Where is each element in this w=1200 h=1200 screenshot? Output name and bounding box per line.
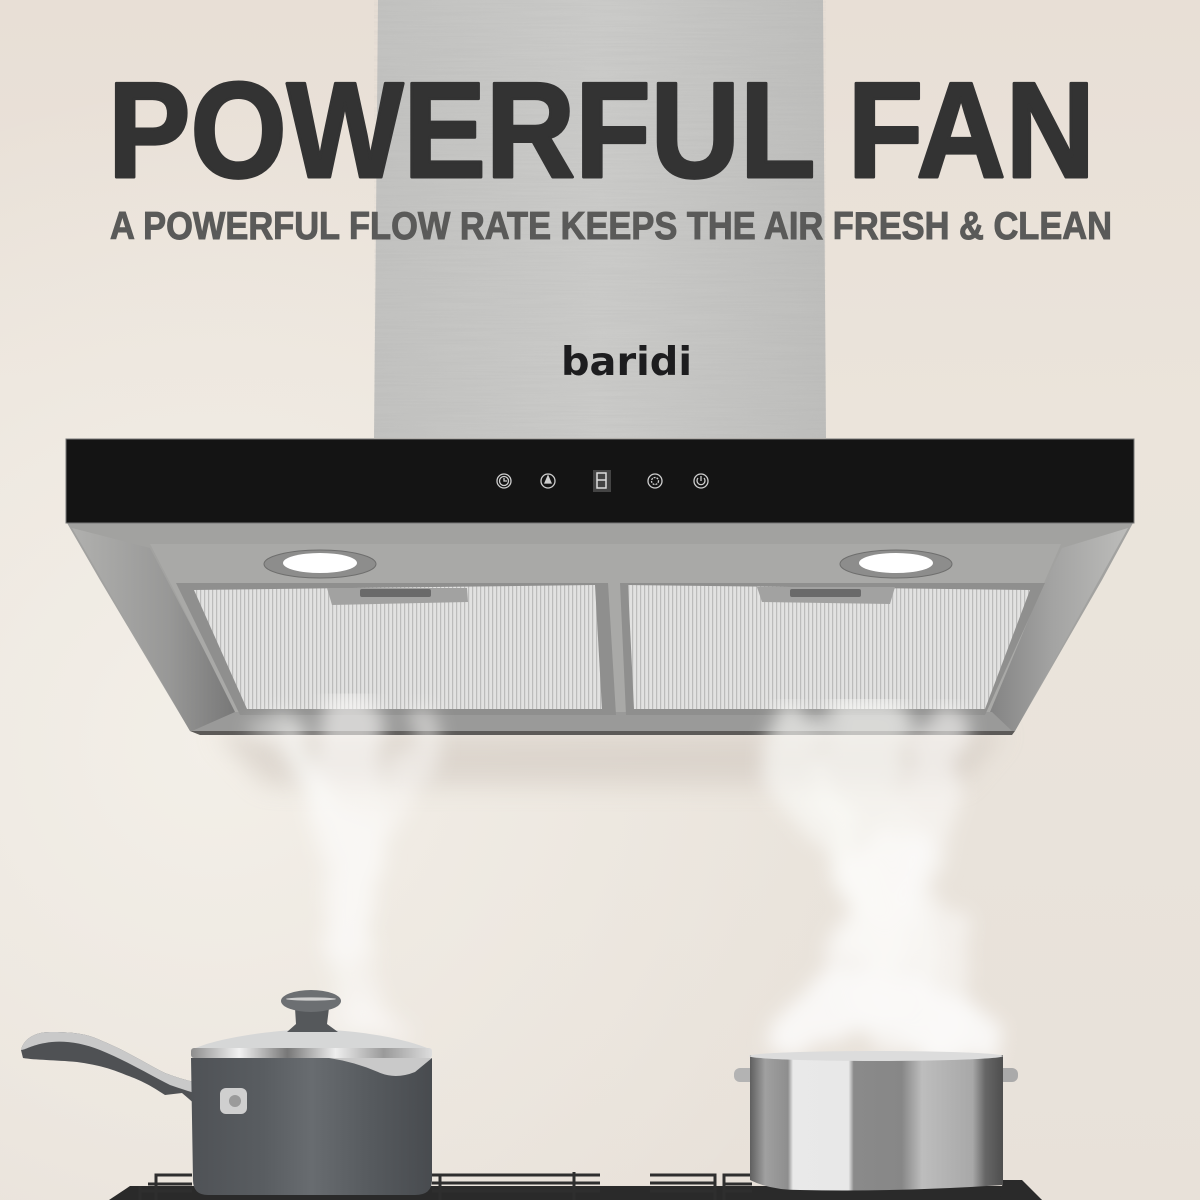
right filter bbox=[620, 583, 1045, 715]
stock pot bbox=[734, 1051, 1018, 1190]
logo: baridi: baridi bbox=[561, 340, 692, 385]
steam left bbox=[270, 725, 420, 1040]
icon: power bbox=[694, 474, 708, 488]
control icons bbox=[497, 470, 708, 492]
left filter bbox=[176, 583, 616, 715]
left light bbox=[264, 550, 376, 578]
pot rim bbox=[749, 1051, 1003, 1061]
title: POWERFUL FAN bbox=[108, 54, 1095, 206]
icon: fan bbox=[648, 474, 662, 488]
hood body underside bbox=[67, 523, 1133, 735]
pot body bbox=[750, 1055, 1003, 1190]
right light bbox=[840, 550, 952, 578]
pan spout rim bbox=[329, 1058, 432, 1076]
hood shadow on wall bbox=[215, 732, 1005, 785]
pan body bbox=[191, 1058, 432, 1195]
glass lid bbox=[191, 1029, 432, 1050]
lid knob bbox=[281, 990, 341, 1032]
range hood bbox=[66, 439, 1134, 735]
digit display bbox=[593, 470, 611, 492]
icon: timer bbox=[497, 474, 511, 488]
pan handle bbox=[21, 1032, 225, 1115]
pot left handle bbox=[734, 1068, 763, 1082]
stove grate bbox=[109, 1172, 1042, 1200]
steam right bbox=[785, 730, 975, 1040]
pot right handle bbox=[994, 1068, 1018, 1082]
lid rim bbox=[191, 1048, 432, 1058]
control panel glass band bbox=[66, 439, 1134, 523]
chimney with baridi logo bbox=[374, 0, 826, 438]
handle rivet plate bbox=[220, 1088, 247, 1114]
saucepan with lid bbox=[21, 990, 432, 1195]
icon: light bbox=[541, 474, 555, 488]
handle chrome highlight bbox=[21, 1032, 225, 1108]
